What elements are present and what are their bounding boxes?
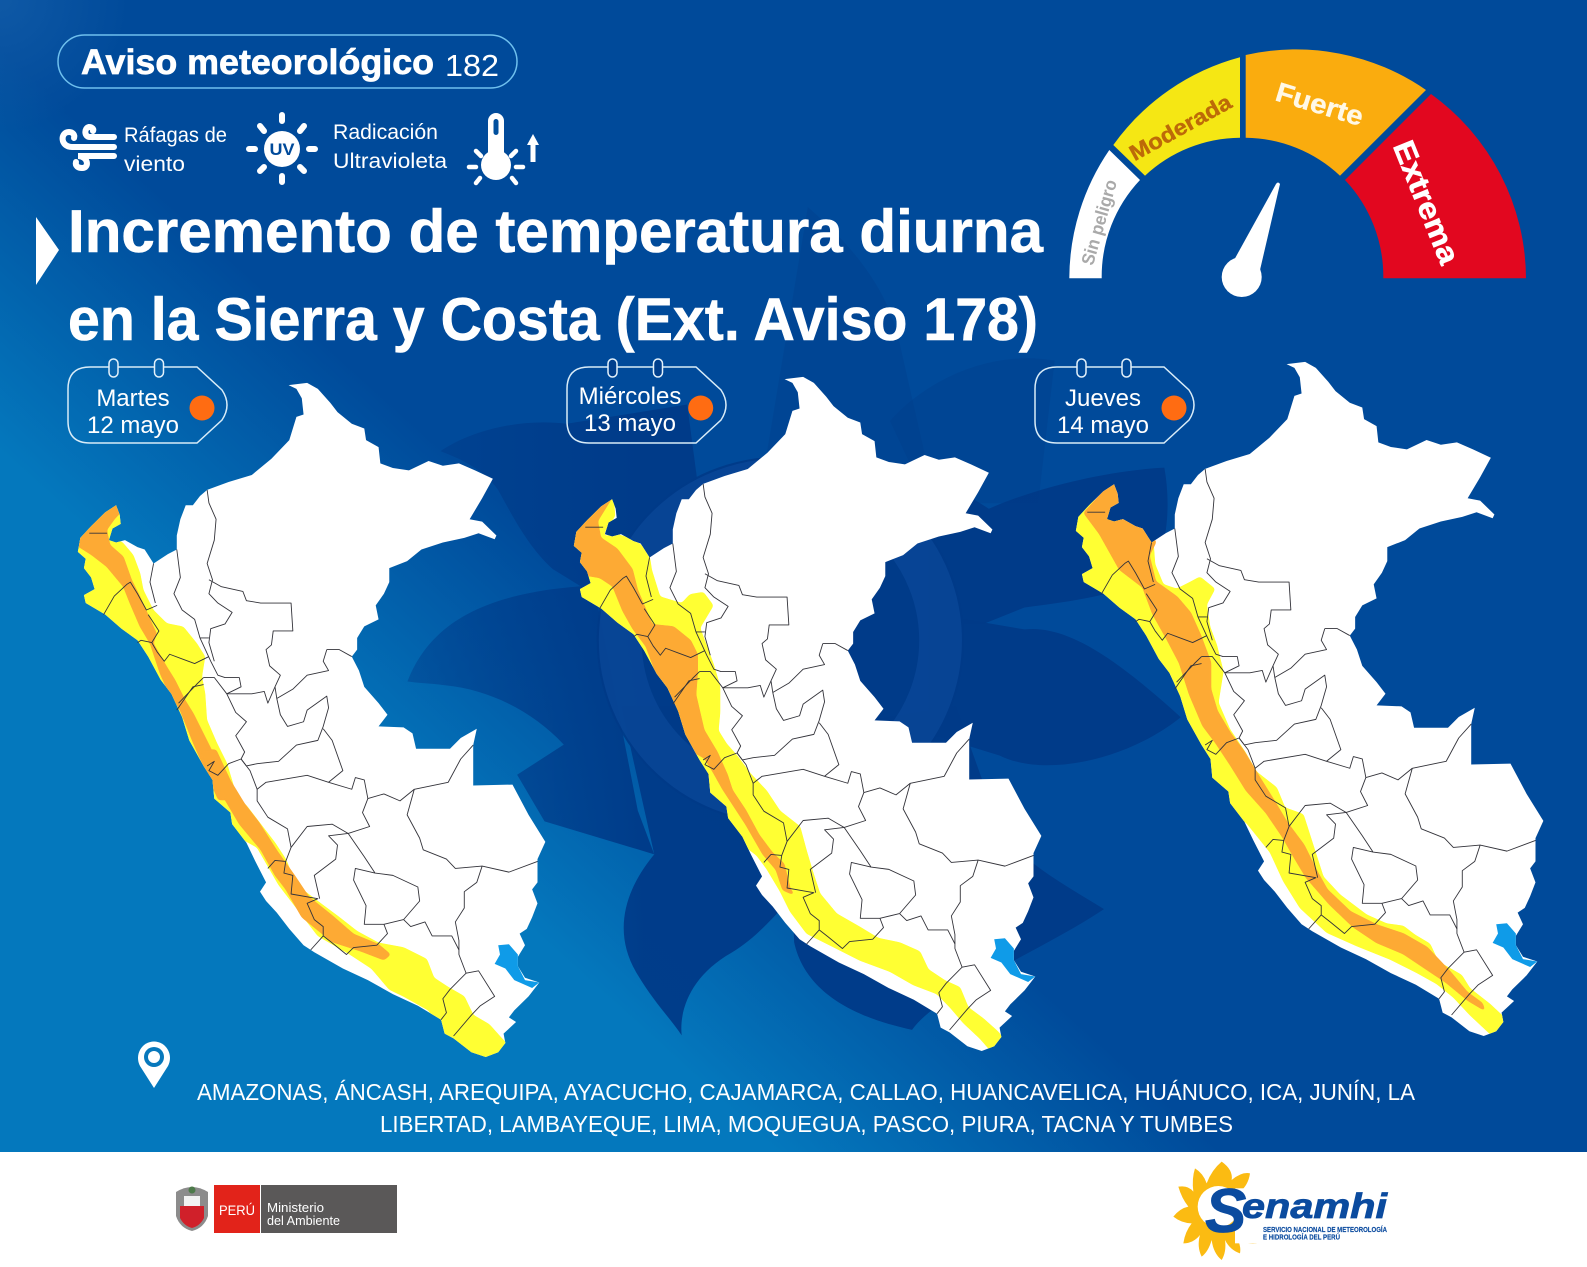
gauge segment: Sin peligro	[1069, 150, 1140, 278]
decorative swirl	[407, 207, 1181, 1035]
icon: UV sun	[249, 115, 315, 182]
icon: UV sun: UV	[270, 140, 295, 159]
icon: wind gusts	[63, 127, 114, 168]
coat of arms	[176, 1186, 208, 1231]
label: Ráfagas de viento: viento	[124, 153, 185, 176]
date tag: Miércoles 13 mayo: 13 mayo	[584, 410, 676, 437]
logo: Perú Ministerio del Ambiente: Ministerio	[267, 1200, 324, 1215]
date tag: Martes 12 mayo: Martes	[96, 385, 170, 412]
sun emblem	[1173, 1162, 1392, 1260]
heading	[68, 198, 1044, 353]
title marker	[36, 217, 59, 285]
alert band moderate, day 1	[78, 505, 506, 1057]
gauge segment: Moderada: Moderada	[1125, 89, 1237, 166]
footer band	[0, 1152, 1587, 1267]
icon: thermometer rising	[469, 113, 539, 183]
date tag: Martes 12 mayo: 12 mayo	[87, 412, 179, 439]
label: Radicación Ultravioleta: Radicación	[333, 121, 438, 144]
gauge segment: Extrema: Extrema	[1386, 136, 1466, 269]
label: Ráfagas de viento	[124, 124, 227, 176]
date tag: Jueves 14 mayo	[1035, 359, 1194, 443]
gauge segment: Extrema	[1345, 94, 1526, 278]
title pill: Aviso meteorológico 182: 182	[445, 48, 499, 83]
gauge needle	[1222, 182, 1280, 297]
logo: Perú Ministerio del Ambiente	[176, 1185, 397, 1233]
title pill: Aviso meteorológico 182	[58, 35, 517, 88]
logo: Perú Ministerio del Ambiente: PERÚ	[219, 1202, 255, 1218]
alert band strong, day 1 north	[78, 505, 225, 800]
date tag: Miércoles 13 mayo: Miércoles	[579, 383, 681, 410]
label: Radicación Ultravioleta: Ultravioleta	[333, 150, 447, 173]
label: Radicación Ultravioleta	[333, 121, 447, 173]
regions list: LIBERTAD, LAMBAYEQUE, LIMA, MOQUEGUA, PASCO, PIURA, TACNA Y TUMBES	[380, 1111, 1233, 1137]
logo: Senamhi: SERVICIO NACIONAL DE METEOROLOGÍA	[1263, 1225, 1387, 1234]
logo: Senamhi: enamhi	[1242, 1187, 1388, 1226]
regions list: AMAZONAS, ÁNCASH, AREQUIPA, AYACUCHO, CAJAMARCA, CALLAO, HUANCAVELICA, HUÁNUCO, ICA, JUNÍN, LA	[197, 1079, 1416, 1105]
map: Martes 12 mayo	[36, 383, 545, 1062]
gauge segment: Fuerte: Fuerte	[1272, 77, 1367, 132]
logo: Senamhi	[1173, 1162, 1392, 1260]
map: Miércoles 13 mayo	[563, 377, 1041, 1052]
logo: Senamhi: E HIDROLOGÍA DEL PERÚ	[1263, 1232, 1340, 1242]
heading: en la Sierra y Costa (Ext. Aviso 178)	[68, 286, 1038, 353]
gauge segment: Moderada	[1113, 57, 1240, 176]
alert band moderate, day 2	[563, 494, 1005, 1052]
date tag: Jueves 14 mayo: 14 mayo	[1057, 412, 1149, 439]
gauge	[1069, 49, 1526, 297]
date tag: Martes 12 mayo	[68, 359, 227, 443]
alert band moderate, day 3	[1057, 493, 1507, 1040]
alert band strong, day 1 south	[200, 750, 391, 960]
icon: location pin	[138, 1042, 170, 1088]
map: Jueves 14 mayo	[1057, 362, 1543, 1040]
logo: Perú Ministerio del Ambiente: del Ambiente	[267, 1213, 340, 1228]
alert band strong, day 2	[563, 494, 793, 893]
heading: Incremento de temperatura diurna	[68, 198, 1044, 265]
logo: Senamhi: S	[1205, 1177, 1246, 1246]
label: Ráfagas de viento: Ráfagas de	[124, 124, 227, 147]
gauge segment: Sin peligro: Sin peligro	[1077, 177, 1121, 267]
gauge segment: Fuerte	[1246, 49, 1426, 176]
date tag: Jueves 14 mayo: Jueves	[1065, 385, 1141, 412]
title pill: Aviso meteorológico 182: Aviso meteorológico	[81, 43, 434, 82]
alert band strong, day 3	[1085, 475, 1483, 1008]
regions list	[197, 1079, 1416, 1137]
date tag: Miércoles 13 mayo	[567, 359, 726, 443]
